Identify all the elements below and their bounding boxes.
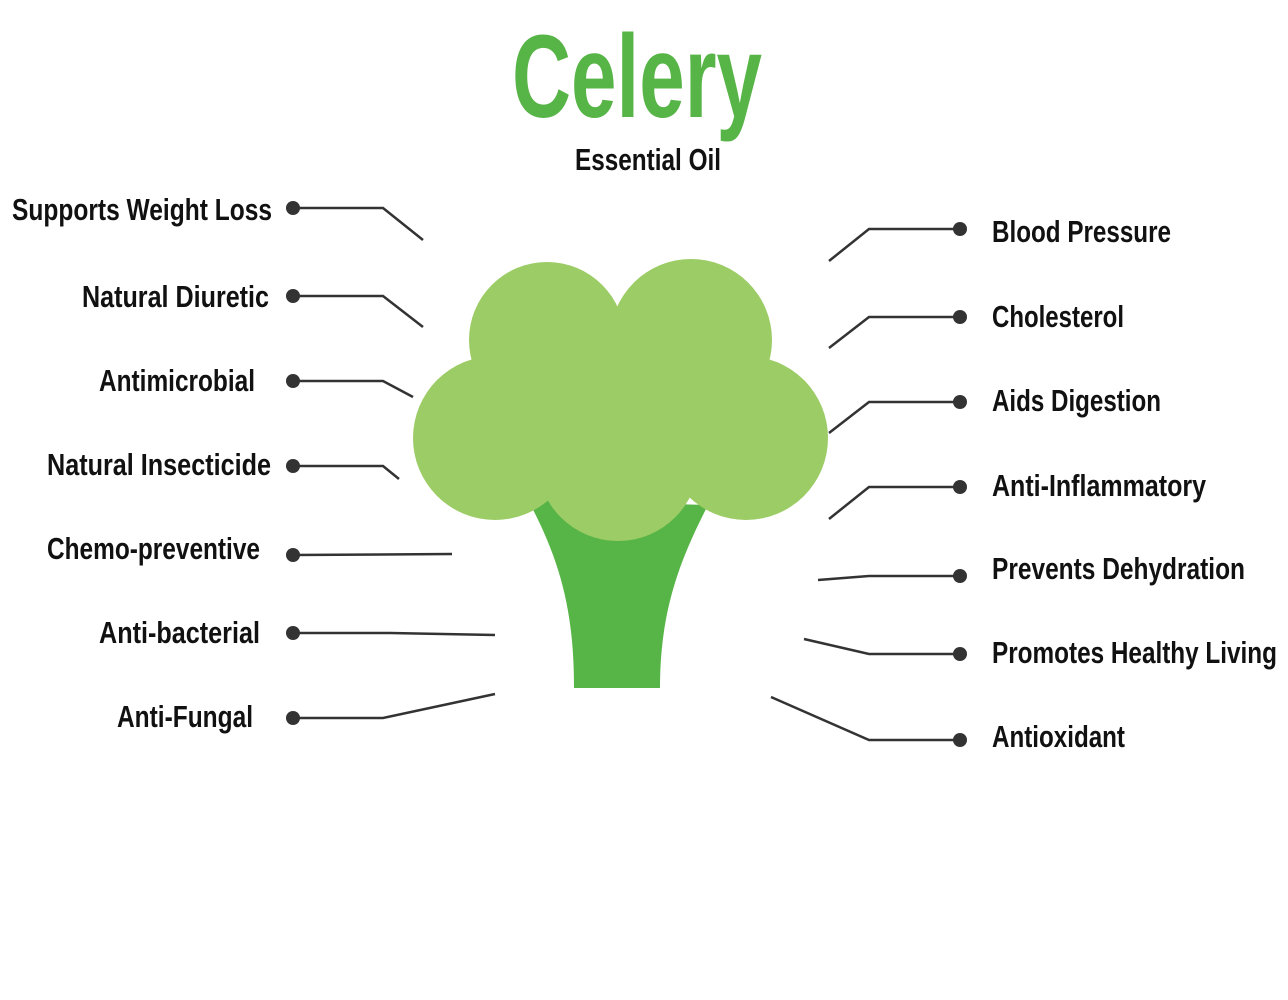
right labels bbox=[771, 214, 1277, 754]
right labels: Cholesterol bbox=[992, 299, 1124, 334]
left labels bbox=[12, 192, 495, 734]
left labels: Chemo-preventive bbox=[47, 531, 260, 566]
left labels: Supports Weight Loss bbox=[12, 192, 272, 227]
stem bbox=[528, 500, 708, 688]
left labels: Natural Insecticide bbox=[47, 447, 271, 482]
right labels: Blood Pressure bbox=[992, 214, 1171, 249]
broccoli illustration bbox=[413, 259, 828, 688]
right labels: Anti-Inflammatory bbox=[992, 468, 1207, 503]
title: Celery bbox=[512, 11, 762, 143]
left labels: Anti-bacterial bbox=[99, 615, 260, 650]
left labels: Antimicrobial bbox=[99, 363, 255, 398]
florets bbox=[413, 259, 828, 541]
left labels: Anti-Fungal bbox=[117, 699, 253, 734]
subtitle: Essential Oil bbox=[575, 142, 721, 177]
right labels: Aids Digestion bbox=[992, 383, 1161, 418]
right labels: Antioxidant bbox=[992, 719, 1125, 754]
left labels: Natural Diuretic bbox=[82, 279, 269, 314]
